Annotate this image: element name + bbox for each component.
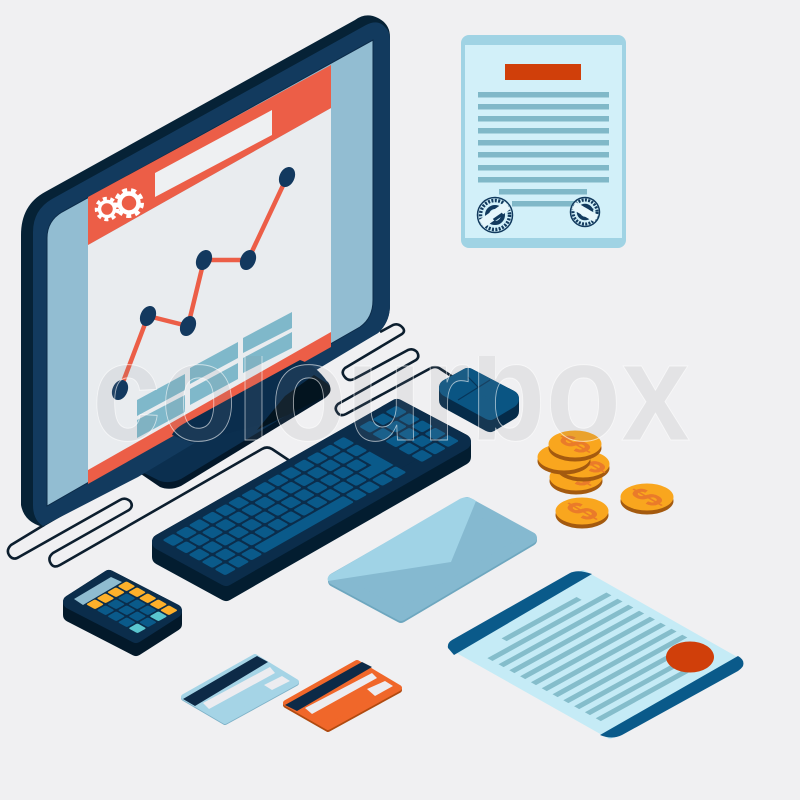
keyboard [160,406,463,593]
calculator keys [86,581,178,633]
calculator [70,577,178,649]
monitor screen [47,40,373,506]
contract lying flat [448,571,743,738]
search box [155,110,272,197]
contract top band [448,571,592,655]
credit card orange [285,662,399,729]
large gear [116,190,142,216]
coin stack second: $ [565,450,617,480]
coin front: $ [557,497,609,527]
keyboard top face [160,407,463,578]
cable: keyboard to monitor [8,448,290,566]
numeric keypad [359,406,459,462]
coins [538,430,674,528]
monitor stand base [135,370,330,489]
data table [137,312,292,438]
line chart [109,164,298,403]
calculator display [74,577,122,605]
contract seal [666,642,714,672]
page header [88,65,331,245]
monitor [21,15,390,527]
envelope flap [328,497,476,581]
watermark: colourbox [92,313,690,470]
keyboard body side [160,407,463,593]
document with stamps [461,35,626,248]
envelope [328,497,531,617]
mouse [448,377,510,423]
contract text lines [477,587,720,721]
cable: mouse to monitor [336,324,456,415]
monitor bezel [33,22,390,526]
monitor back edge [21,15,390,527]
monitor stand neck [172,360,330,443]
document title [505,64,581,80]
main keys [162,437,407,575]
coin right: $ [622,483,674,513]
coin stack third [538,444,590,474]
contract bottom band [600,656,743,738]
gear icons [96,190,142,220]
coin stack top: $ [550,430,602,460]
coin stack bottom: $ [551,463,603,493]
credit card blue [183,656,296,722]
document text lines [478,92,609,206]
page background [88,108,331,472]
stamp left [478,198,512,232]
page footer [88,332,331,484]
small gear [96,198,118,220]
stamp right [570,198,600,226]
